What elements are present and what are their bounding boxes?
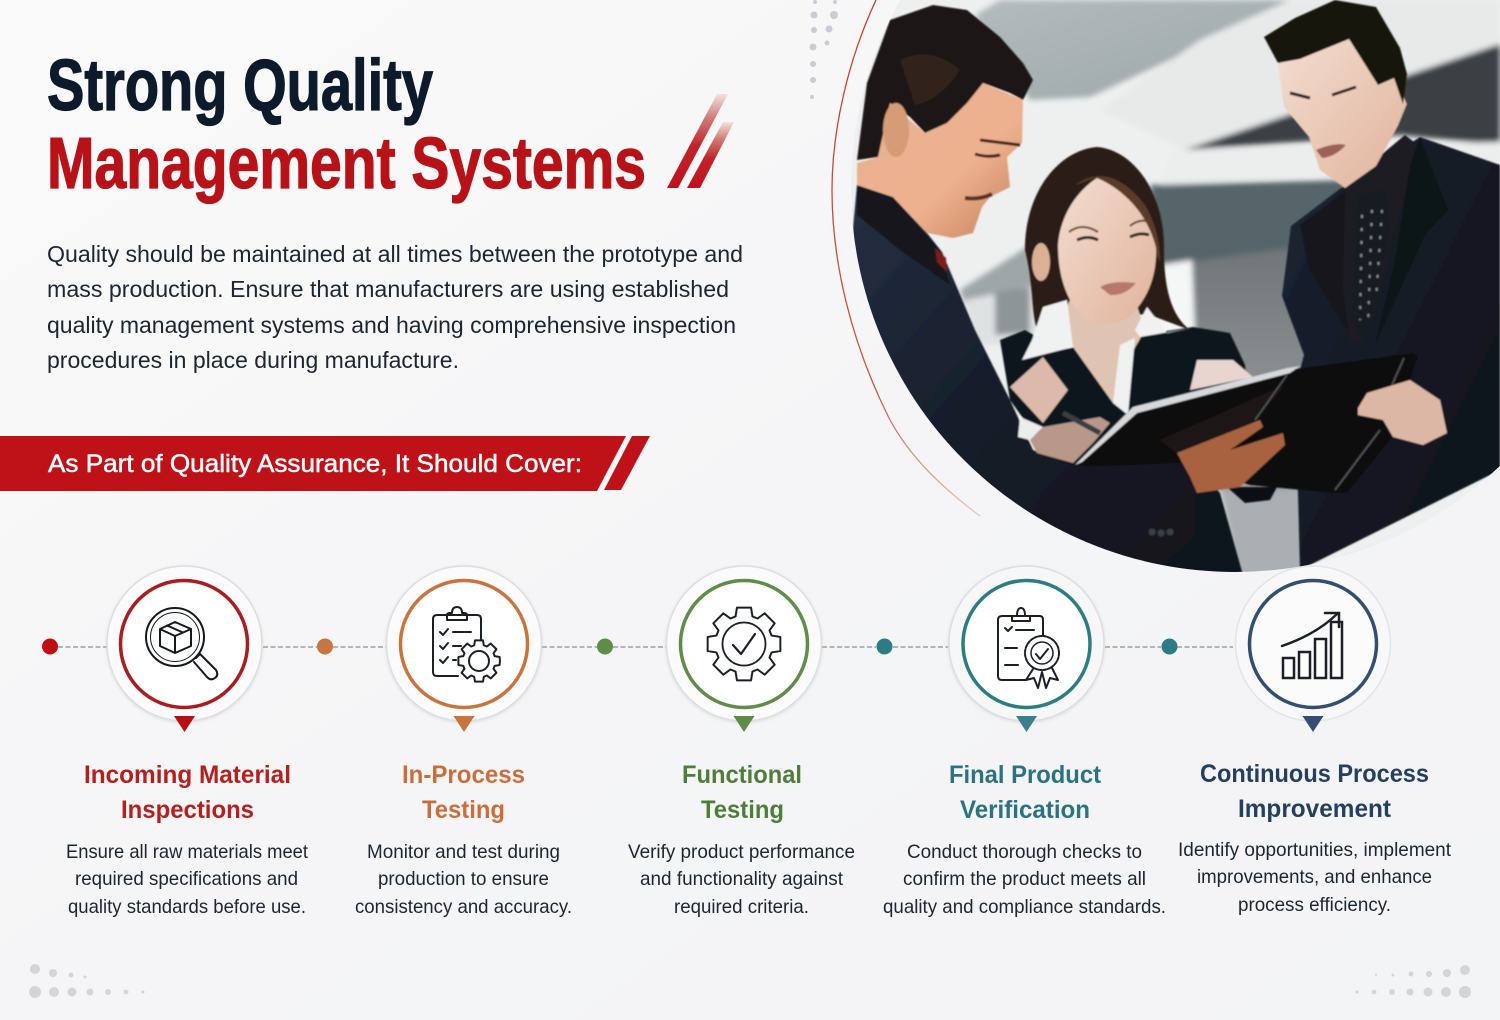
step 2 description: consistency and accuracy. — [355, 896, 572, 918]
left man — [850, 185, 1195, 575]
step 3 description: required criteria. — [674, 896, 809, 918]
step 2 heading: In-Process — [402, 761, 525, 789]
step 1 description: required specifications and — [75, 868, 298, 890]
title line 1: Strong Quality — [47, 46, 433, 126]
step 3: functional testing — [628, 566, 855, 918]
step 2 heading — [402, 761, 525, 824]
step 5: continuous process improvement — [1178, 566, 1452, 916]
intro paragraph: procedures in place during manufacture. — [47, 347, 459, 373]
icon: checklist and gear badge — [386, 566, 542, 732]
decorative dots bottom left — [29, 964, 144, 998]
step 5 description: improvements, and enhance — [1197, 866, 1432, 888]
step 4 heading: Final Product — [949, 761, 1102, 789]
step 3 description — [628, 841, 855, 918]
step 4 description: confirm the product meets all — [903, 868, 1146, 890]
step 1: incoming material inspections — [66, 566, 309, 918]
decorative dots top — [810, 0, 838, 99]
step 1 heading — [84, 761, 291, 824]
step 4 description: Conduct thorough checks to — [907, 841, 1142, 863]
intro paragraph — [47, 241, 743, 373]
folder — [1075, 353, 1418, 493]
step 4: final product verification — [883, 566, 1166, 918]
step 5 description — [1178, 839, 1452, 916]
step 5 heading: Improvement — [1238, 795, 1392, 823]
banner — [0, 436, 650, 491]
step 3 heading — [682, 761, 802, 824]
intro paragraph: mass production. Ensure that manufacturers are using established — [47, 276, 729, 302]
right man — [1282, 137, 1500, 570]
step 5 description: process efficiency. — [1238, 894, 1391, 916]
icon: clipboard with rosette badge — [949, 566, 1104, 732]
woman — [1000, 327, 1250, 575]
step 1 heading: Incoming Material — [84, 761, 291, 789]
right hand — [1358, 380, 1447, 445]
step 4 heading — [949, 761, 1102, 824]
step 2 heading: Testing — [422, 796, 505, 824]
step 1 description: Ensure all raw materials meet — [66, 841, 309, 863]
step 3 heading: Functional — [682, 761, 802, 789]
icon: inspection badge — [107, 566, 262, 732]
step 2 description: Monitor and test during — [367, 841, 560, 863]
timeline dots — [42, 638, 1178, 654]
left hand on folder — [1177, 420, 1285, 493]
step 2 description: production to ensure — [378, 868, 549, 890]
process timeline — [42, 566, 1452, 918]
step 2 description — [355, 841, 572, 918]
intro paragraph: quality management systems and having comprehensive inspection — [47, 312, 736, 338]
step 4 description: quality and compliance standards. — [883, 896, 1166, 918]
icon: double slash accent — [667, 94, 734, 188]
step 5 heading — [1200, 760, 1429, 823]
step 4 heading: Verification — [960, 796, 1090, 824]
icon: growth chart badge — [1236, 566, 1390, 732]
icon: gear with check badge — [666, 566, 822, 732]
timeline dashed connectors — [58, 646, 1233, 648]
step 5 heading: Continuous Process — [1200, 760, 1429, 788]
photo: three colleagues reviewing a folder — [840, 0, 1500, 580]
title line 2: Management Systems — [47, 124, 646, 204]
step 3 heading: Testing — [701, 796, 784, 824]
step 5 description: Identify opportunities, implement — [1178, 839, 1452, 861]
step 3 description: Verify product performance — [628, 841, 855, 863]
step 4 description — [883, 841, 1166, 918]
photo arc outline — [832, 0, 980, 516]
step 1 heading: Inspections — [121, 796, 254, 824]
step 3 description: and functionality against — [640, 868, 844, 890]
intro paragraph: Quality should be maintained at all times between the prototype and — [47, 241, 743, 267]
step 2: in-process testing — [355, 566, 572, 918]
pen hand — [1018, 417, 1043, 440]
decorative dots bottom right — [1356, 965, 1471, 998]
step 1 description: quality standards before use. — [68, 896, 306, 918]
banner text: As Part of Quality Assurance, It Should Cover: — [48, 450, 582, 478]
step 1 description — [66, 841, 309, 918]
title — [47, 46, 646, 204]
